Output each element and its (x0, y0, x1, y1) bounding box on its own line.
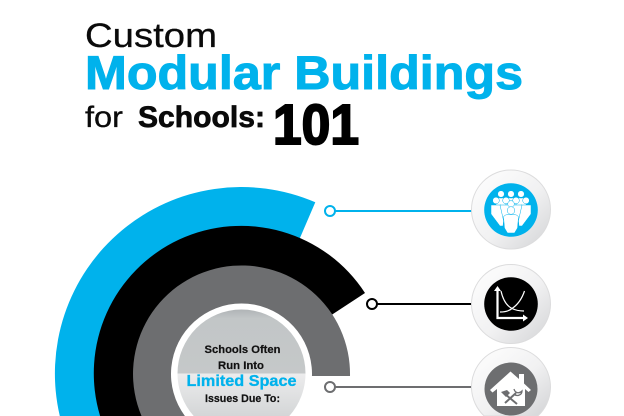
tools (501, 389, 522, 404)
center text line 3: Issues Due To: (205, 393, 280, 405)
connector: black (367, 299, 474, 309)
title number: 101: 101 (273, 93, 359, 157)
chart arrowheads (494, 286, 528, 322)
blue arc (55, 187, 315, 416)
icon: house with tools (472, 347, 550, 416)
center text line 2: Run Into (218, 360, 264, 372)
connector: gray (325, 382, 474, 392)
center text line 1: Schools Often (204, 344, 281, 356)
title (85, 17, 523, 157)
gray arc (133, 265, 350, 416)
connector: blue (325, 206, 474, 216)
title word: Schools: Schools: (138, 101, 265, 134)
center disc (171, 303, 312, 416)
icon: chart curves (472, 264, 550, 344)
house outline (490, 372, 531, 406)
icon: people group (472, 170, 550, 249)
title word: for: for (85, 101, 123, 134)
black arc (94, 226, 365, 416)
chart curves (500, 291, 524, 312)
center highlight: Limited Space: Limited Space (186, 373, 297, 390)
title line: Custom: Custom (85, 17, 217, 55)
title line: Modular Buildings: Modular Buildings (85, 46, 523, 99)
